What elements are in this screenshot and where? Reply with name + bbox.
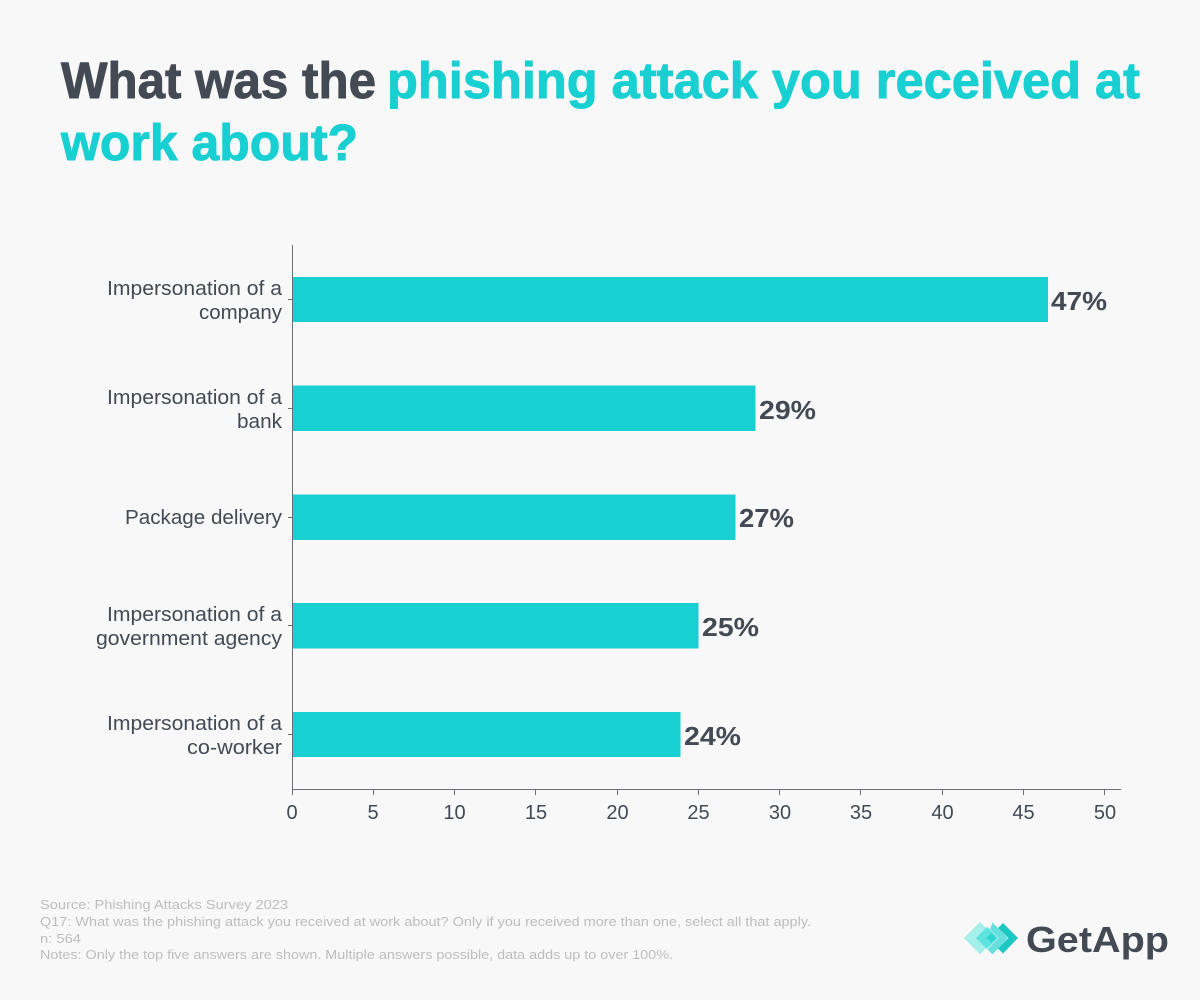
wordmark: GetApp [1026,919,1169,960]
title: work about? [60,114,358,171]
title [60,52,1140,171]
category labels: Impersonation of a [107,387,283,409]
source notes: Q17: What was the phishing attack you received at work about? Only if you received more than one, select all that apply. [40,914,811,929]
category labels [96,278,283,759]
logo: GetApp [964,919,1169,960]
x axis labels: 15 [525,802,547,824]
value labels: 25% [702,612,759,642]
source notes: Notes: Only the top five answers are shown. Multiple answers possible, data adds up to over 100%. [40,947,673,962]
x axis labels: 10 [443,802,466,824]
category labels: company [199,302,282,324]
value labels: 24% [684,721,741,751]
category labels: Impersonation of a [107,713,283,735]
value labels: 29% [759,395,816,425]
x axis labels: 50 [1094,802,1116,824]
category labels: bank [237,411,283,433]
title: phishing attack you received at [387,52,1140,109]
x axis labels: 0 [286,802,298,824]
x axis labels: 20 [606,802,629,824]
bar chart [96,245,1121,824]
value labels [684,286,1107,751]
category labels: Impersonation of a [107,278,283,300]
x axis labels: 5 [367,802,379,824]
category labels: Impersonation of a [107,604,283,626]
icon: diamonds [964,922,1018,954]
value labels: 27% [739,503,794,533]
bars [292,277,1048,757]
x axis labels: 45 [1012,802,1035,824]
x axis labels: 25 [687,802,710,824]
category labels: government agency [96,628,282,650]
x axis labels: 40 [931,802,954,824]
x axis labels: 35 [850,802,872,824]
source notes: n: 564 [40,931,81,946]
title: What was the [61,52,376,109]
source notes: Source: Phishing Attacks Survey 2023 [40,897,288,912]
x axis labels [286,802,1116,824]
category labels: Package delivery [125,507,282,529]
value labels: 47% [1051,286,1107,316]
category labels: co-worker [187,737,282,759]
axes [288,245,1121,795]
x axis labels: 30 [769,802,791,824]
source notes [40,897,811,962]
